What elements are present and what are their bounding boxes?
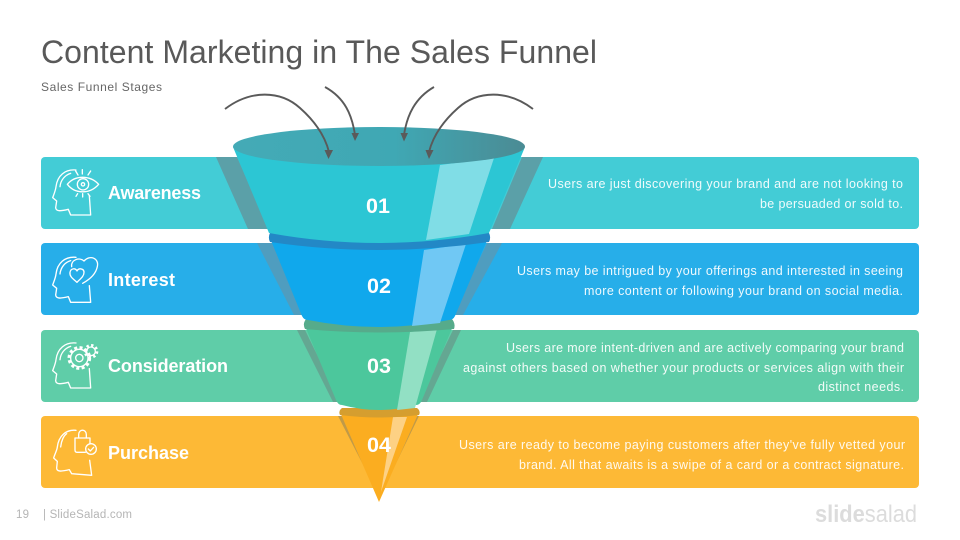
description: awareness: Users are just discovering your brand and are not looking to (548, 177, 903, 191)
icon: head with hearts (53, 257, 98, 302)
stage numbers: 03 (367, 354, 391, 378)
description: consideration: distinct needs. (818, 380, 904, 394)
funnel stage 03 (304, 318, 455, 410)
label: consideration: Consideration (108, 356, 228, 376)
stage numbers: 04 (367, 433, 391, 457)
funnel stage 02 (269, 230, 490, 327)
label: awareness: Awareness (108, 183, 201, 203)
arrows into funnel (225, 87, 533, 159)
description: awareness: be persuaded or sold to. (760, 197, 903, 211)
description: consideration (463, 341, 904, 394)
description: awareness (548, 177, 903, 211)
stage numbers: 02 (367, 274, 391, 298)
panel: awareness (41, 157, 919, 229)
description: purchase (459, 438, 905, 472)
description: purchase: Users are ready to become paying customers after they've fully vetted your (459, 438, 905, 452)
icon: head with eye (53, 170, 99, 215)
panel: consideration (41, 330, 919, 402)
stage numbers: 01 (366, 194, 390, 218)
panel: interest (41, 243, 919, 315)
description: purchase: brand. All that awaits is a swipe of a card or a contract signature. (519, 458, 904, 472)
funnel stage 01 (233, 127, 525, 243)
description: interest (517, 264, 903, 298)
title: Content Marketing in The Sales Funnel (41, 34, 597, 70)
description: interest: Users may be intrigued by your offerings and interested in seeing (517, 264, 903, 278)
funnel shadows (216, 157, 543, 488)
description: interest: more content or following your brand on social media. (584, 284, 903, 298)
stage numbers (366, 194, 391, 457)
icon: head with gears (53, 343, 97, 388)
description: consideration: against others based on whether your products or services align with their (463, 361, 904, 375)
footer page number: 19 (16, 509, 29, 521)
footer source: | SlideSalad.com (43, 509, 132, 521)
funnel stage 04 (339, 408, 420, 502)
label: interest: Interest (108, 270, 175, 290)
label: purchase: Purchase (108, 443, 189, 463)
description: consideration: Users are more intent-driven and are actively comparing your brand (506, 341, 904, 355)
subtitle: Sales Funnel Stages (41, 80, 162, 94)
logo: slidesalad (815, 501, 917, 528)
panel: purchase (41, 416, 919, 488)
icon: head with shopping bag (54, 430, 96, 475)
